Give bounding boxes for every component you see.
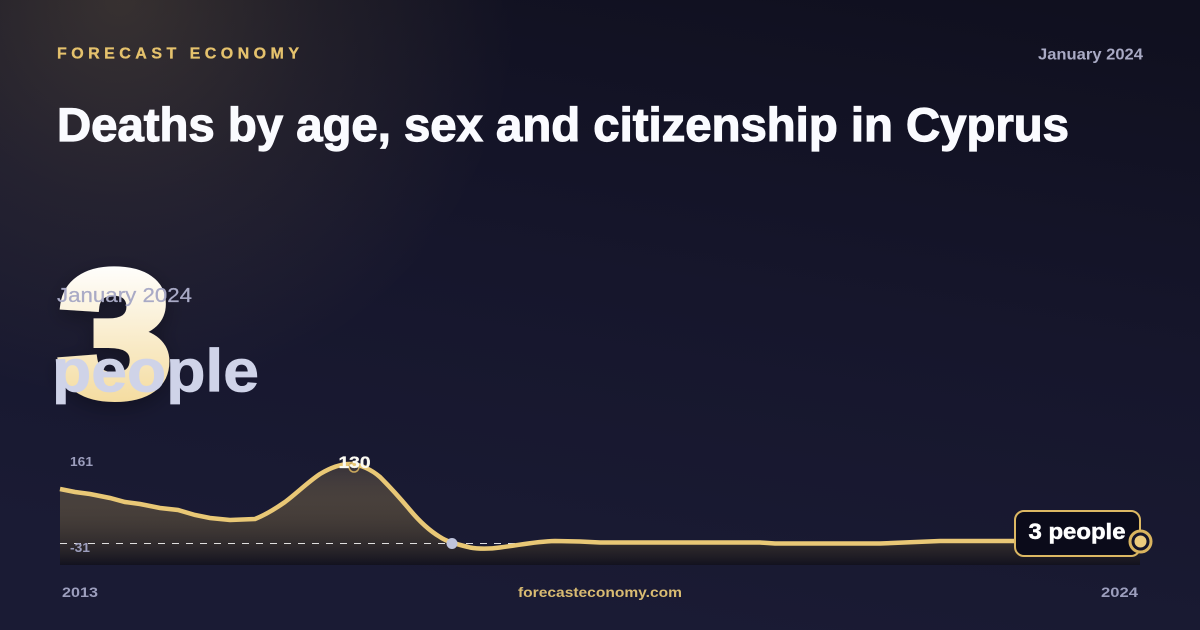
big number: 3 <box>59 235 171 433</box>
max marker <box>349 462 359 472</box>
line chart <box>60 453 1140 565</box>
max value: 130 <box>338 453 370 472</box>
date subtitle: January 2024 <box>57 285 192 307</box>
title: Deaths by age, sex and citizenship in Cyprus <box>57 98 1069 151</box>
trend line <box>60 464 1140 549</box>
brand label: FORECAST ECONOMY <box>57 46 299 62</box>
value callout <box>1015 511 1140 556</box>
mid point <box>446 538 458 549</box>
source url: forecasteconomy.com <box>518 584 682 600</box>
axis max label: 161 <box>70 455 93 469</box>
value callout: 3 people <box>1028 519 1126 544</box>
baseline dashed <box>60 542 525 544</box>
date top right: January 2024 <box>1038 46 1143 64</box>
start year: 2013 <box>62 584 98 600</box>
axis min label: -31 <box>70 541 90 555</box>
end marker <box>1130 531 1151 552</box>
chart area fill <box>60 464 1140 565</box>
unit text: people <box>52 338 259 404</box>
end year: 2024 <box>1101 584 1138 600</box>
